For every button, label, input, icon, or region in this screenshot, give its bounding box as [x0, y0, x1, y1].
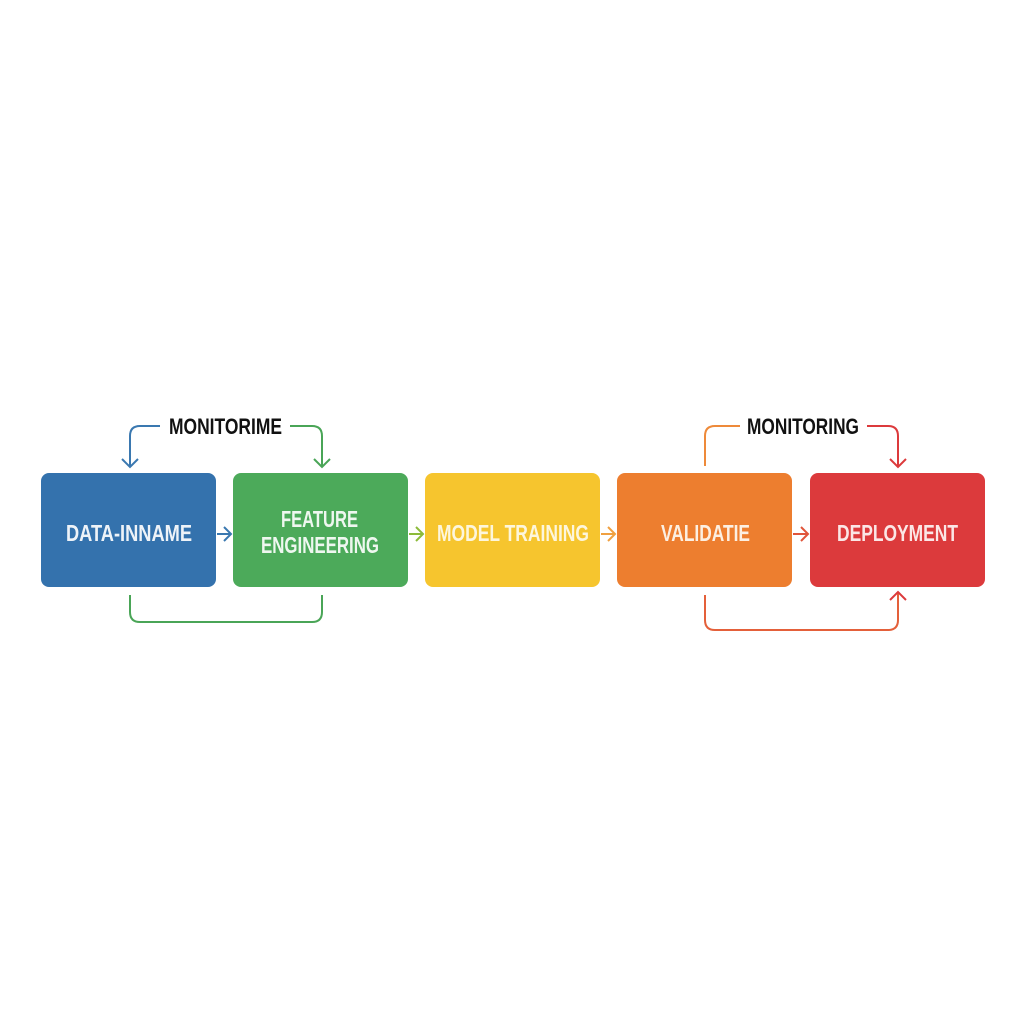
bottom arrow: validatie to deployment	[705, 592, 906, 630]
panel: model training	[425, 473, 600, 587]
panel: data-inname	[41, 473, 216, 587]
right monitoring label: MONITORING	[747, 414, 859, 439]
panel: model training: MODEL TRAINING	[437, 520, 589, 546]
panel: feature engineering: FEATURE	[281, 506, 358, 532]
panel: validatie	[617, 473, 792, 587]
panel: feature engineering	[233, 473, 408, 587]
arrow: validatie to monitoring to deployment	[705, 426, 906, 467]
arrow: left monitoring to data	[122, 426, 160, 467]
arrow: validatie to deployment	[793, 527, 808, 541]
arrow: model to validatie	[601, 527, 615, 541]
panel: data-inname: DATA-INNAME	[66, 520, 192, 546]
bottom connector: data to feature	[130, 595, 322, 622]
arrow: data to feature	[217, 527, 231, 541]
panel: feature engineering: ENGINEERING	[261, 532, 379, 558]
arrow: feature to model training	[409, 527, 423, 541]
panel: deployment: DEPLOYMENT	[837, 520, 958, 546]
arrow: left monitoring to feature	[290, 426, 330, 467]
panel: deployment	[810, 473, 985, 587]
panel: validatie: VALIDATIE	[661, 520, 750, 546]
left monitoring label: MONITORIME	[169, 414, 282, 439]
